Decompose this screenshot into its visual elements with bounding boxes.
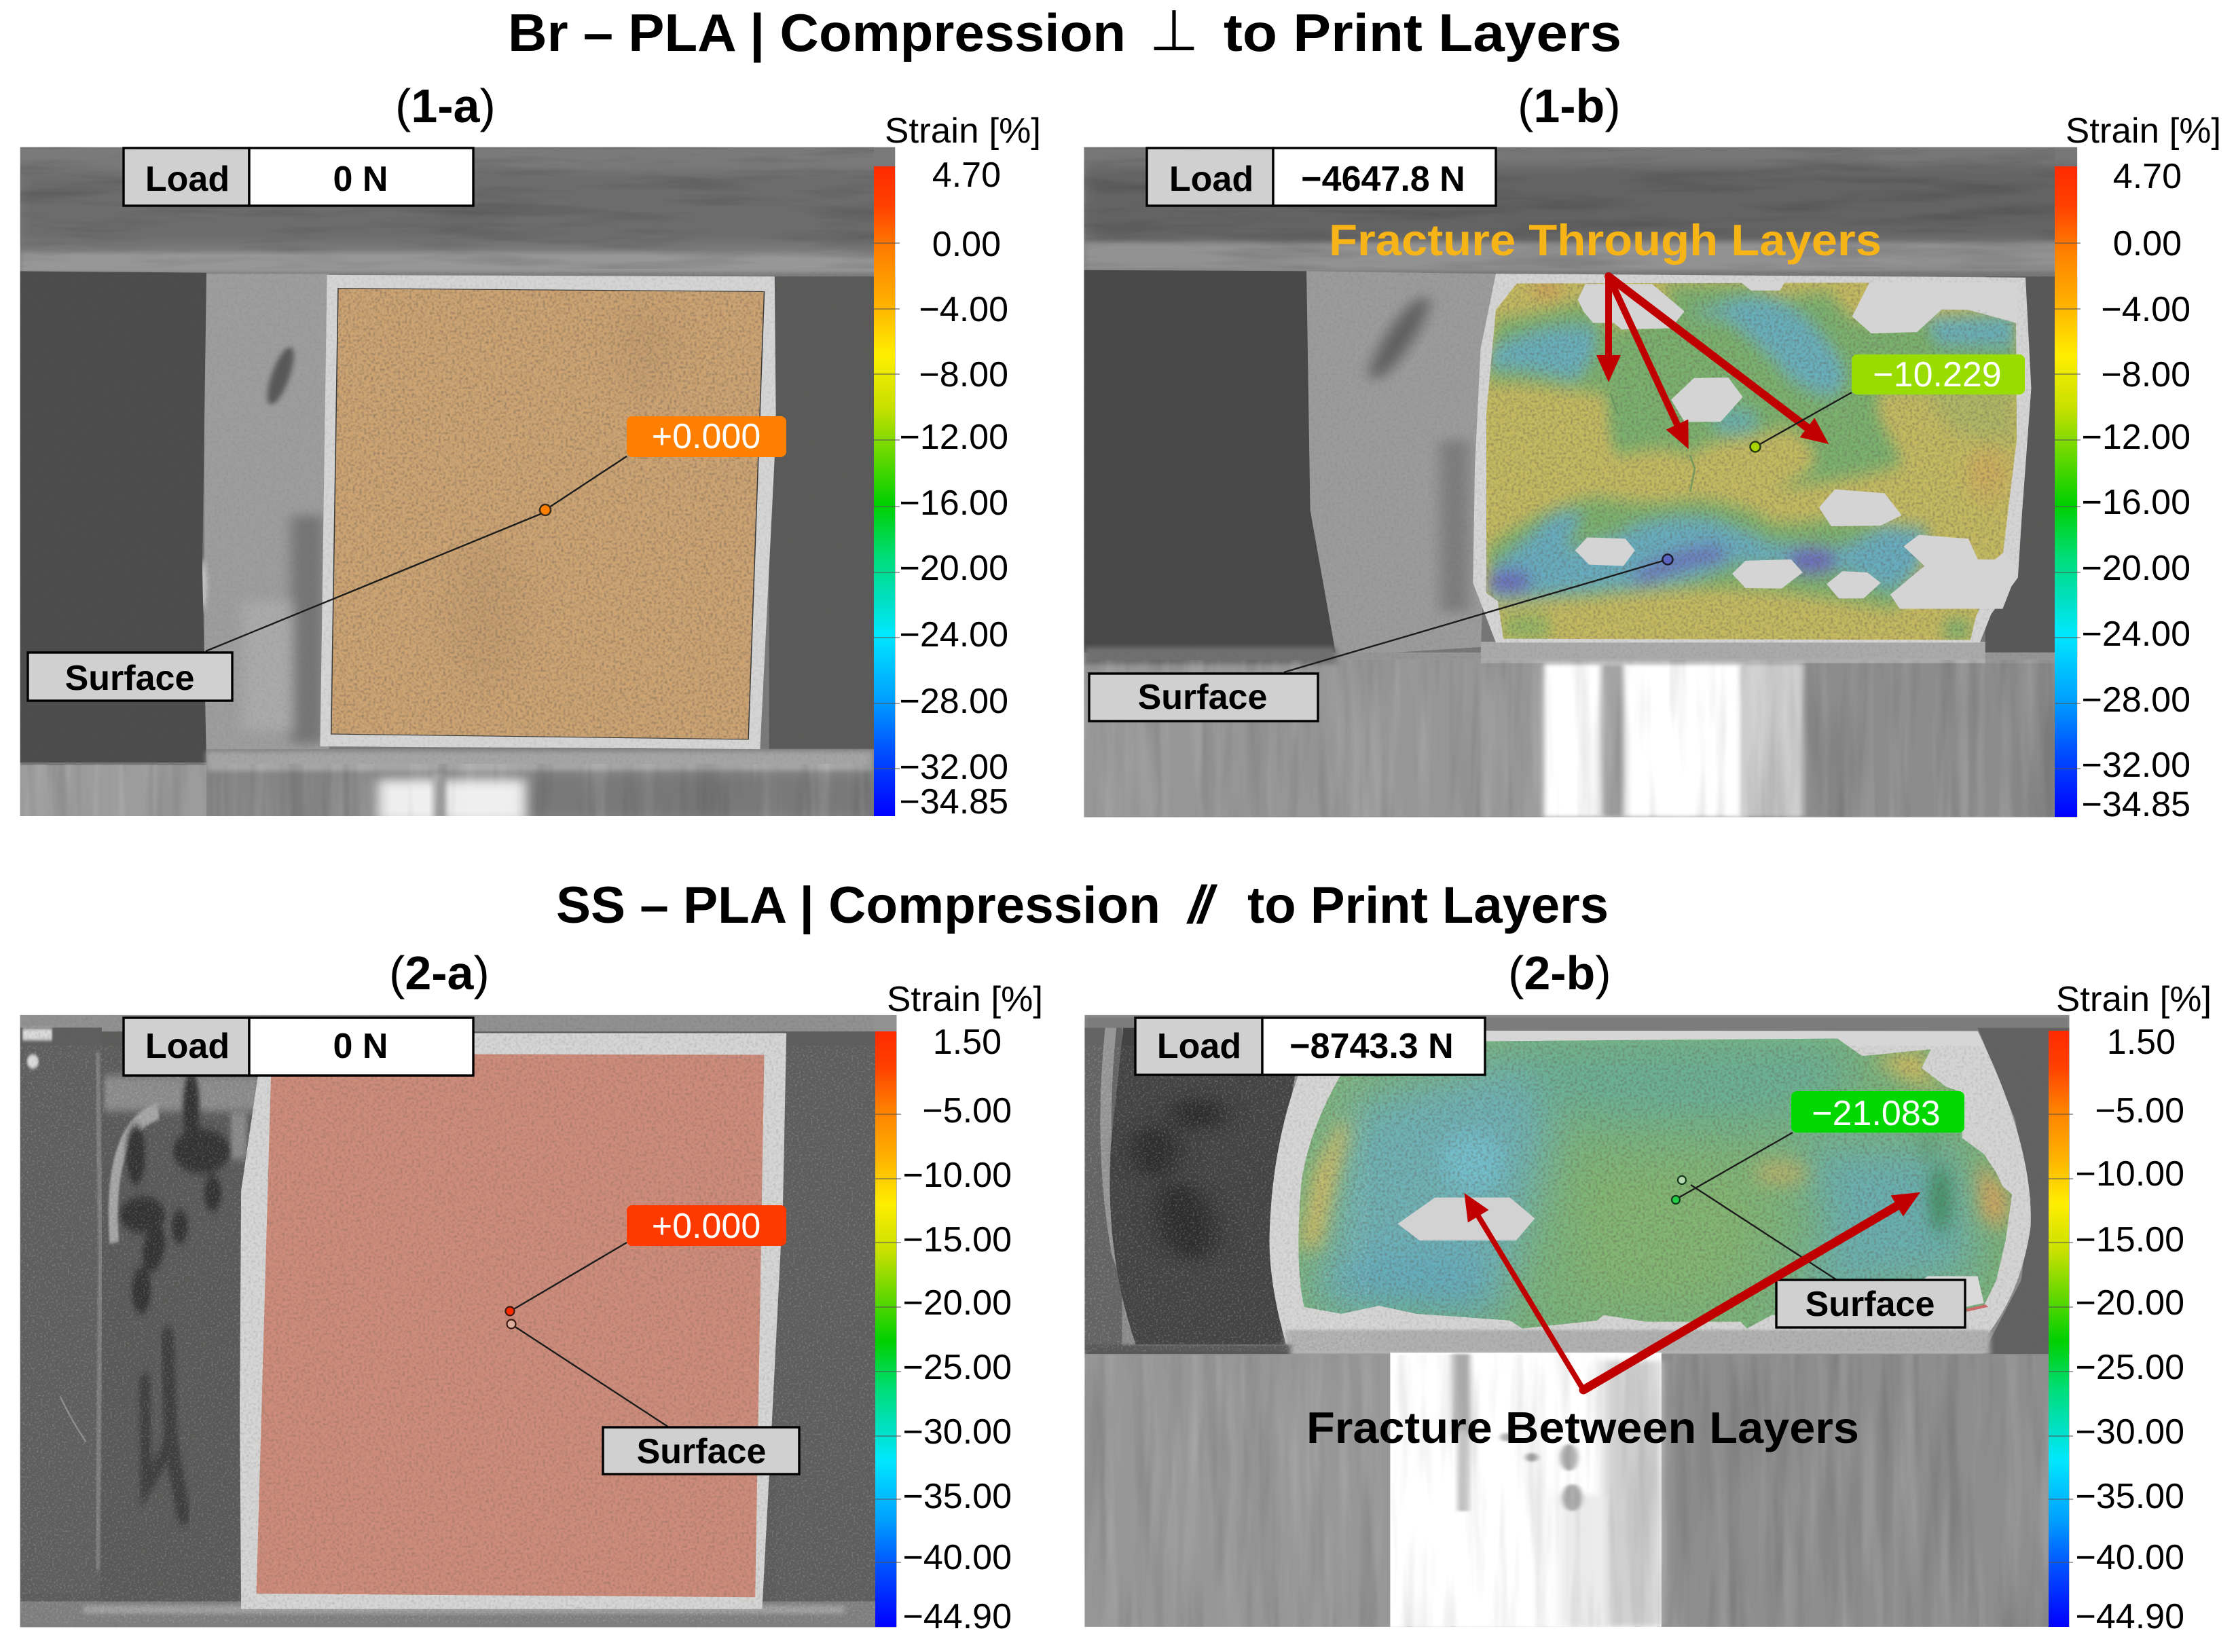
title: Br-PLA compression perpendicular to print layers: to Print Layers: [1224, 3, 1621, 62]
color bar labels 2-a: −10.00: [903, 1156, 1012, 1195]
color bar labels 1-a: Strain [%]: [885, 111, 1041, 151]
photo: specimen 2-b with barreled strain field: [1084, 1015, 2070, 1627]
callout: measurement value 2-b: [1672, 1091, 1964, 1280]
color bar labels 2-b: −44.90: [2075, 1597, 2184, 1636]
annotation: fracture between layers: Fracture Between Layers: [1306, 1403, 1859, 1452]
load box 1-a: 0 N: [333, 160, 388, 199]
color bar labels 1-b: −32.00: [2082, 746, 2191, 785]
title: SS-PLA compression parallel to print layers: SS – PLA | Compression: [556, 877, 1160, 935]
annotation: fracture through layers: Fracture Through Layers: [1329, 215, 1882, 265]
title: Br-PLA compression perpendicular to print layers: [508, 0, 1621, 64]
color bar labels 1-b: −16.00: [2082, 483, 2191, 522]
arrows: fracture through layers: [1609, 276, 1814, 433]
photo: specimen 1-b with fractured strain field: [1084, 147, 2077, 818]
load box 1-b: Load: [1169, 160, 1253, 199]
color bar labels 1-a: [885, 111, 1041, 822]
color bar labels 2-a: 1.50: [933, 1023, 1002, 1062]
color bar labels 1-b: −20.00: [2082, 549, 2191, 588]
title: Br-PLA compression perpendicular to print layers: Br – PLA | Compression: [508, 3, 1126, 62]
load box 2-a: Load: [145, 1027, 230, 1066]
color bar labels 2-a: −20.00: [903, 1283, 1012, 1323]
color bar labels 1-a: −12.00: [899, 418, 1008, 457]
title: SS-PLA compression parallel to print layers: //: [1186, 875, 1218, 934]
color bar labels 2-a: −44.90: [903, 1597, 1012, 1636]
load box 2-b: Load: [1157, 1027, 1241, 1066]
load box 2-b: [1135, 1018, 1485, 1075]
color bar labels 1-a: −20.00: [899, 549, 1008, 588]
callout: measurement value 2-a: +0.000: [652, 1207, 760, 1246]
color bar labels 2-b: Strain [%]: [2056, 980, 2212, 1019]
callout: surface label 1-a: [28, 653, 232, 701]
callout: surface label 2-b: [1776, 1280, 1965, 1327]
title: SS-PLA compression parallel to print layers: to Print Layers: [1247, 877, 1609, 934]
callout: surface label 1-a: Surface: [65, 659, 194, 698]
color bar labels 2-a: −35.00: [903, 1477, 1012, 1516]
color bar labels 1-a: −28.00: [899, 682, 1008, 721]
color bar labels 2-b: [2056, 980, 2212, 1636]
callout: measurement value 2-a: [505, 1205, 786, 1427]
load box 2-b: −8743.3 N: [1289, 1027, 1454, 1066]
color bar labels 1-a: −8.00: [919, 355, 1008, 394]
callout: measurement value 1-a: [206, 416, 786, 651]
color bar labels 1-a: 4.70: [932, 155, 1001, 195]
callout: surface label 1-b: Surface: [1138, 678, 1267, 717]
color bar labels 1-a: −4.00: [919, 290, 1008, 329]
color bar labels 1-a: −24.00: [899, 615, 1008, 655]
title: SS-PLA compression parallel to print layers: [556, 875, 1609, 935]
color bar labels 1-a: 0.00: [932, 225, 1001, 264]
color bar labels 1-a: −32.00: [899, 748, 1008, 787]
panel: 1-b strain map: [1084, 111, 2221, 824]
color bar 2-b: [2049, 1031, 2073, 1627]
callout: measurement value 1-b: [1284, 354, 2025, 672]
callout: surface label 2-a: [603, 1427, 799, 1474]
photo: specimen 2-a with red strain field: [20, 1015, 896, 1630]
color bar labels 1-a: −16.00: [899, 483, 1008, 523]
photo: specimen 1-a with orange strain field: [20, 147, 895, 823]
color bar labels 1-b: [2066, 111, 2221, 824]
color bar labels 1-b: 0.00: [2113, 224, 2182, 263]
color bar labels 2-b: −5.00: [2095, 1091, 2184, 1131]
color bar labels 1-a: −34.85: [899, 782, 1008, 822]
color bar labels 2-b: −25.00: [2075, 1348, 2184, 1387]
load box 1-b: −4647.8 N: [1301, 160, 1465, 199]
callout: surface label 2-a: Surface: [637, 1432, 766, 1471]
color bar labels 2-b: −35.00: [2075, 1477, 2184, 1516]
color bar labels 2-b: −15.00: [2075, 1220, 2184, 1260]
color bar 1-b: [2055, 166, 2081, 817]
color bar labels 1-b: −12.00: [2082, 418, 2191, 457]
load box 1-a: [124, 148, 473, 206]
callout: measurement value 1-b: −10.229: [1873, 355, 2002, 394]
color bar labels 1-b: −4.00: [2101, 290, 2191, 329]
color bar labels 1-b: −28.00: [2082, 680, 2191, 720]
color bar labels 2-a: [887, 980, 1043, 1636]
arrows: fracture between layers: [1474, 1202, 1904, 1390]
color bar labels 1-b: 4.70: [2113, 157, 2182, 196]
color bar labels 1-b: −8.00: [2101, 355, 2191, 394]
load box 2-a: 0 N: [333, 1027, 388, 1066]
callout: surface label 2-b: Surface: [1806, 1285, 1935, 1324]
color bar labels 2-b: −10.00: [2075, 1154, 2184, 1194]
color bar labels 2-a: Strain [%]: [887, 980, 1043, 1019]
callout: surface label 1-b: [1089, 674, 1318, 721]
color bar labels 2-b: −30.00: [2075, 1412, 2184, 1452]
load box 2-a: [124, 1018, 473, 1076]
panel: 2-a strain map: [20, 980, 1043, 1636]
color bar labels 2-b: 1.50: [2107, 1023, 2176, 1062]
color bar labels 2-a: −30.00: [903, 1412, 1012, 1452]
callout: measurement value 1-a: +0.000: [652, 417, 760, 456]
color bar 1-a: [874, 166, 900, 816]
color bar 2-a: [875, 1031, 901, 1627]
heading: panel 1-b: (1-b): [1518, 79, 1621, 132]
color bar labels 2-a: −15.00: [903, 1220, 1012, 1260]
color bar labels 2-b: −40.00: [2075, 1538, 2184, 1577]
color bar labels 2-a: −5.00: [922, 1091, 1012, 1131]
load box 1-b: [1147, 148, 1496, 206]
color bar labels 2-a: −25.00: [903, 1348, 1012, 1387]
color bar labels 2-b: −20.00: [2075, 1283, 2184, 1323]
callout: measurement value 2-b: −21.083: [1812, 1094, 1941, 1133]
heading: panel 2-b: (2-b): [1508, 947, 1611, 999]
load box 1-a: Load: [145, 160, 230, 199]
color bar labels 2-a: −40.00: [903, 1538, 1012, 1577]
heading: panel 1-a: (1-a): [395, 79, 496, 132]
panel: 1-a strain map: [20, 111, 1041, 823]
color bar labels 1-b: −34.85: [2082, 785, 2191, 824]
heading: panel 2-a: (2-a): [389, 947, 490, 999]
color bar labels 1-b: Strain [%]: [2066, 111, 2221, 151]
panel: 2-b strain map: [1084, 980, 2212, 1636]
color bar labels 1-b: −24.00: [2082, 614, 2191, 654]
